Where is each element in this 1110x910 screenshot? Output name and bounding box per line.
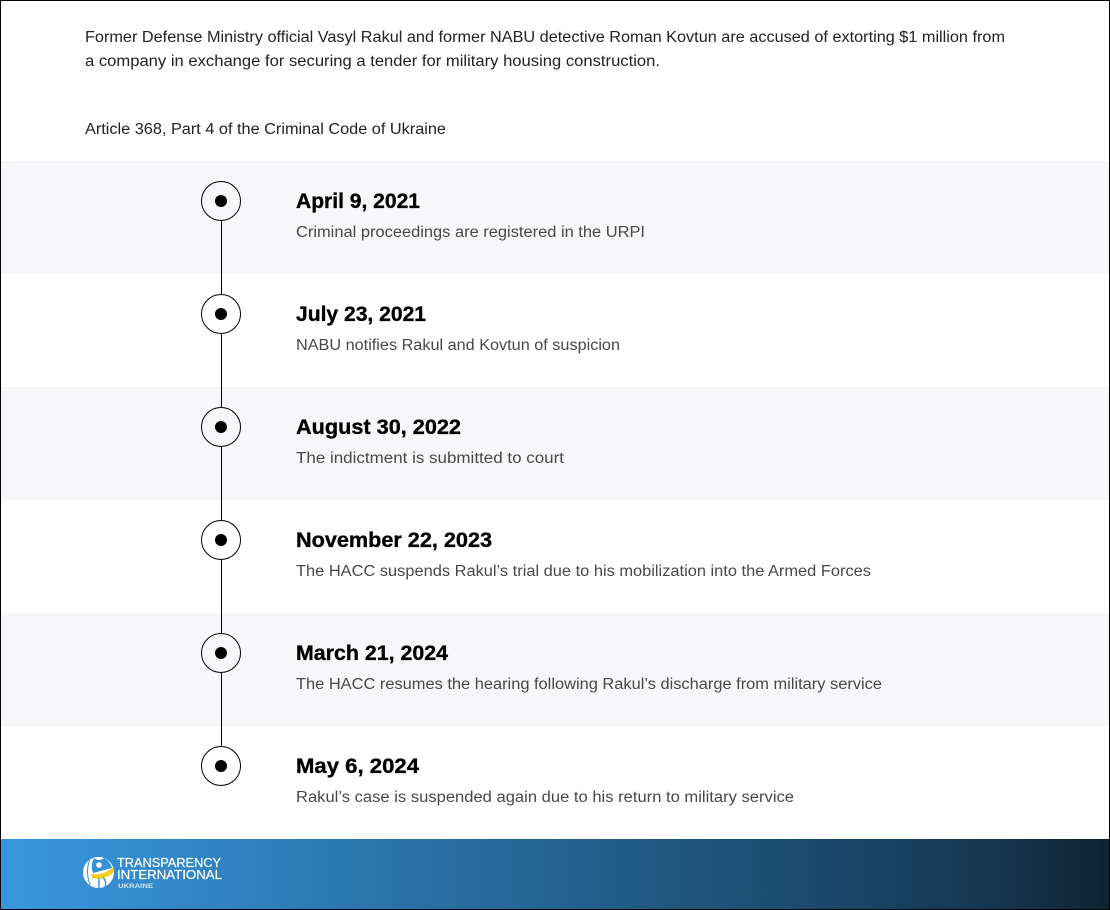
event: March 21, 2024: March 21, 2024 [296,641,448,665]
legal article reference: Article 368, Part 4 of the Criminal Code of Ukraine [85,121,446,138]
event: July 23, 2021: NABU notifies Rakul and Kovtun of suspicion [296,337,620,354]
event: April 9, 2021 [202,182,645,241]
event: November 22, 2023: The HACC suspends Rakul’s trial due to his mobilization into the Armed Forces [296,563,871,580]
event: May 6, 2024 [202,746,794,806]
event: April 9, 2021: Criminal proceedings are registered in the URPI [296,224,645,241]
event: March 21, 2024 [202,634,882,693]
event: April 9, 2021: April 9, 2021 [296,189,420,213]
event: August 30, 2022: The indictment is submitted to court [296,450,565,467]
event: August 30, 2022 [202,408,565,467]
intro text: Former Defense Ministry official Vasyl Rakul and former NABU detective Roman Kovtun are accused of extorting $1 million from [85,29,1005,46]
logo: Transparency International Ukraine [83,856,222,890]
intro text: a company in exchange for securing a tender for military housing construction. [85,53,660,70]
event: July 23, 2021 [202,294,620,354]
footer band [0,839,1110,910]
logo: Transparency International Ukraine: TRANSPARENCY [117,856,222,870]
event: August 30, 2022: August 30, 2022 [296,415,461,439]
timeline [0,161,1110,806]
icon: globe with figure [83,857,114,888]
event: November 22, 2023: November 22, 2023 [296,528,492,552]
logo: Transparency International Ukraine: INTERNATIONAL [117,868,222,882]
event: November 22, 2023 [202,520,871,580]
event: May 6, 2024: May 6, 2024 [296,754,419,778]
event: July 23, 2021: July 23, 2021 [296,302,426,326]
logo: Transparency International Ukraine: UKRAINE [118,883,154,890]
event: May 6, 2024: Rakul’s case is suspended again due to his return to military service [296,789,794,806]
intro text [85,29,1005,70]
event: March 21, 2024: The HACC resumes the hearing following Rakul’s discharge from military service [296,676,882,693]
